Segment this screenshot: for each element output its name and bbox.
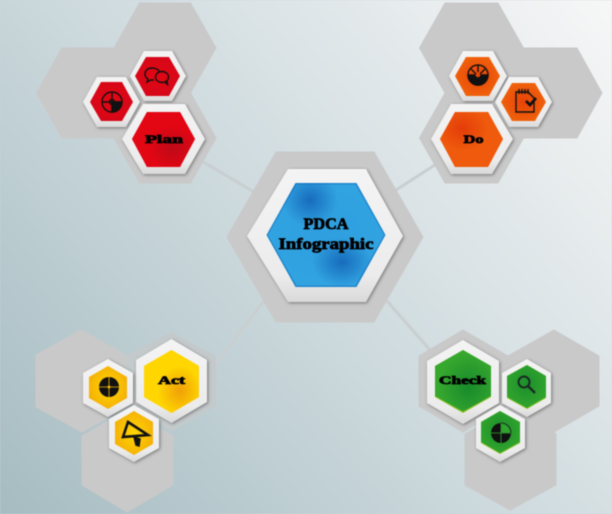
- panel: Check: [419, 330, 599, 510]
- hexagon: target icon: [449, 51, 507, 101]
- hexagon: Plan: [122, 104, 205, 174]
- hexagon: target icon: [83, 359, 133, 417]
- hexagon: Do: [431, 104, 513, 174]
- connector lines: [200, 160, 438, 372]
- label: Check: Check: [439, 375, 487, 387]
- hexagon: Check: [427, 340, 499, 424]
- label: Plan: Plan: [145, 132, 184, 146]
- hexagon: megaphone icon: [109, 405, 159, 462]
- hexagon: note icon: [495, 77, 552, 127]
- icon: target: [102, 92, 122, 112]
- icon: notepad check: [516, 89, 536, 112]
- panel: center PDCA: [227, 152, 423, 322]
- icon: target: [99, 377, 119, 397]
- hexagon: target icon: [476, 405, 525, 462]
- hexagon: Act: [136, 339, 207, 423]
- label: Do: Do: [464, 132, 484, 146]
- icon: target: [468, 65, 488, 85]
- panel: Do: [420, 3, 602, 183]
- icon: target: [491, 423, 511, 443]
- hexagon: chat icon: [130, 51, 186, 101]
- icon: magnifier: [518, 376, 535, 393]
- icon: megaphone: [123, 422, 148, 446]
- icon: speech bubbles: [145, 68, 168, 84]
- panel: Act: [36, 330, 216, 512]
- heading: PDCA Infographic: [278, 216, 374, 253]
- hexagon: magnifier icon: [502, 359, 551, 417]
- heading: PDCA Infographic: Infographic: [278, 236, 374, 253]
- panel: Plan: [36, 3, 216, 183]
- label: Act: Act: [158, 375, 185, 387]
- hexagon: target icon: [83, 77, 140, 127]
- heading: PDCA Infographic: PDCA: [304, 216, 349, 233]
